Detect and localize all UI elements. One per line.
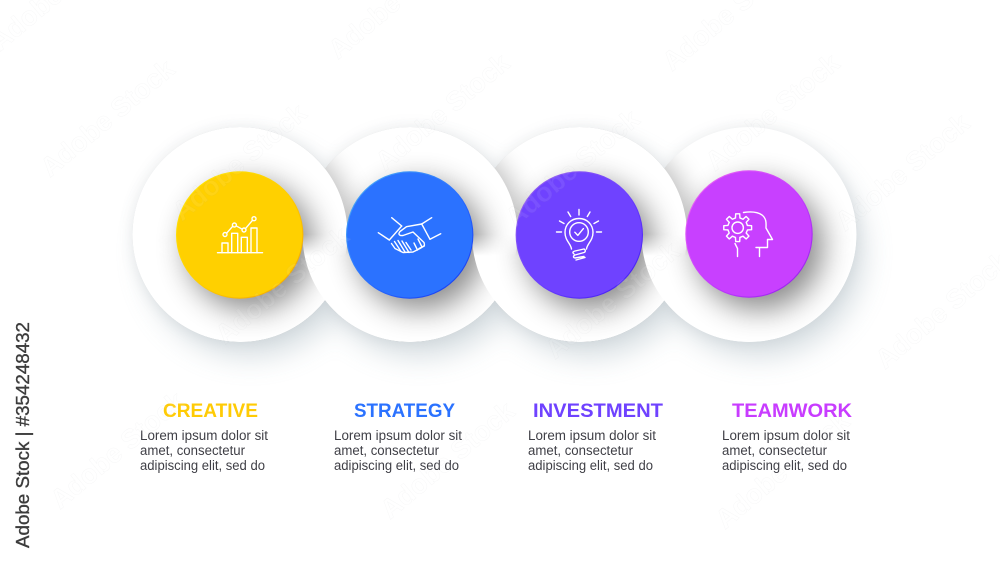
text block: teamwork: Lorem ipsum dolor sit [722,428,850,443]
icon: handshake [378,218,441,252]
text block: strategy: adipiscing elit, sed do [334,458,459,473]
text block: investment: Lorem ipsum dolor sit [528,428,656,443]
text block: investment: amet, consectetur [528,443,634,458]
text block: strategy: amet, consectetur [334,443,440,458]
text block: investment: adipiscing elit, sed do [528,458,653,473]
watermark pattern: Adobe Stock [45,385,191,515]
stock id vertical label: Adobe Stock | #354248432 [13,322,33,548]
purple circle: investment [516,171,643,299]
text block: creative: CREATIVE [163,400,258,422]
text block: investment [528,400,663,473]
icon: head with gear [724,212,772,256]
watermark pattern: Adobe Stock [500,103,646,233]
watermark pattern: Adobe Stock [210,220,356,350]
white interlocking discs [132,127,856,345]
text block: creative: Lorem ipsum dolor sit [140,428,268,443]
icon: bar chart with trend line [218,217,262,253]
text block: strategy: Lorem ipsum dolor sit [334,428,462,443]
text block: strategy [334,400,462,473]
watermark pattern: Adobe Stock [830,107,976,237]
watermark pattern: Adobe Stock [700,47,846,177]
yellow circle: creative [176,171,303,299]
text block: creative: adipiscing elit, sed do [140,458,265,473]
text block: strategy: STRATEGY [354,400,455,422]
blue circle: strategy [346,171,473,299]
magenta circle: teamwork [685,170,813,298]
watermark pattern: Adobe Stock [710,405,856,535]
icon: light bulb with check [556,210,602,260]
text block: teamwork: adipiscing elit, sed do [722,458,847,473]
watermark pattern: Adobe Stock [35,53,181,183]
text block: teamwork [722,400,852,473]
text block: investment: INVESTMENT [533,400,663,422]
watermark pattern: Adobe Stock [540,235,686,365]
text block: teamwork: amet, consectetur [722,443,828,458]
watermark pattern: Adobe Stock [375,395,521,525]
text block: teamwork: TEAMWORK [732,400,852,422]
watermark pattern: Adobe Stock [370,47,516,177]
text block: creative: amet, consectetur [140,443,246,458]
watermark pattern: Adobe Stock [167,97,313,227]
ground shadow under discs [132,126,864,357]
text block: creative [140,400,268,473]
